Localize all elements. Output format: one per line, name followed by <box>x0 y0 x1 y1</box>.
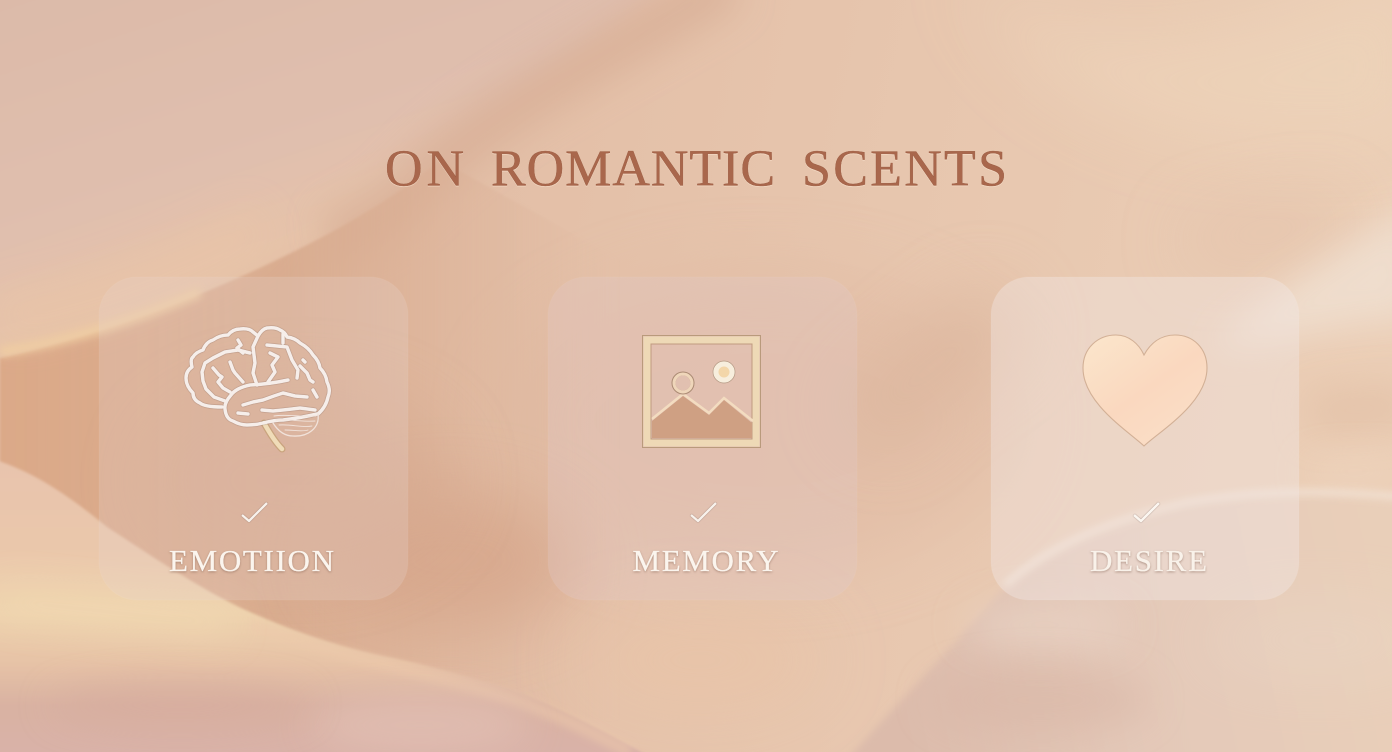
panel: memory <box>548 277 857 600</box>
icon: check mark <box>1134 503 1159 521</box>
title: SCENTS <box>802 140 1007 198</box>
icon: check mark <box>242 503 267 521</box>
icon: heart <box>1083 335 1207 446</box>
label: emotion: EMOTIION <box>169 543 334 578</box>
title <box>385 140 1007 198</box>
lower-right fold <box>845 493 1392 752</box>
panel: emotion <box>99 277 408 600</box>
panel: desire <box>991 277 1299 600</box>
icon: brain <box>186 328 329 449</box>
lower-left fold <box>0 458 660 752</box>
icon: picture frame <box>642 336 760 448</box>
title: ROMANTIC <box>491 140 775 198</box>
icon: check mark <box>691 503 716 521</box>
label: desire: DESIRE <box>1090 543 1207 578</box>
title: ON <box>385 140 464 198</box>
label: memory: MEMORY <box>632 543 778 578</box>
